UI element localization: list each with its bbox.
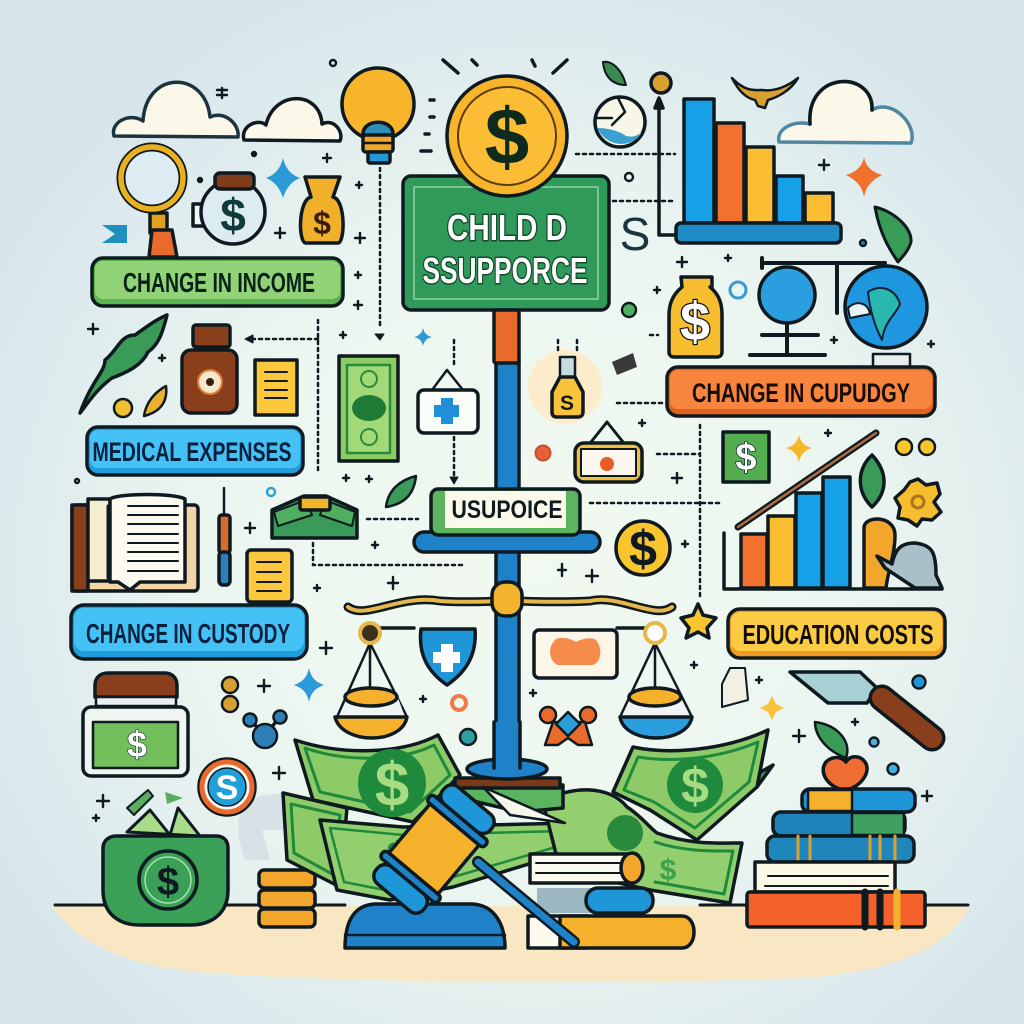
icon: bird [732,78,798,108]
icon: orange s coin: S [216,769,238,807]
icon: shield [420,629,475,685]
main sign [403,176,609,310]
money pile: $ [375,751,409,820]
icon: small smiley [114,399,132,417]
icon: light bulb [342,68,414,163]
icon: clock globe [595,97,645,147]
sign text [422,207,588,291]
icon: gear [895,439,941,526]
icon: jar of money [83,673,188,776]
icon: green arrow [165,792,183,804]
icon: knife [790,672,932,738]
label: usupoice [414,489,600,552]
icon: money bag right: $ [680,292,710,352]
icon: dollar coin [447,76,567,196]
icon: leaf [860,455,884,507]
icon: money bag [301,177,343,243]
icon: first aid sign [418,370,478,433]
decorative sparkles [88,88,934,821]
icon: magnifying glass [121,147,183,257]
icon: apple and leaf [815,722,867,790]
icon: stand base [453,722,563,812]
icon: orange star [846,157,882,197]
icon: money jar [193,173,265,244]
icon: yellow halo bottle [528,350,602,424]
icon: gavel [345,777,574,948]
icon: puzzle [722,668,748,707]
bar chart: lower [724,433,942,589]
coin rays [421,60,567,151]
icon: note 2 [247,550,292,602]
icon: yellow halo bottle: S [560,392,574,415]
icon: dollar coin small [616,521,670,577]
icon: medicine bottle [182,325,237,413]
icon: teal gear [460,729,476,745]
icon: money bag: $ [313,205,331,241]
arrow: solid up to token [655,98,675,235]
signpost pole [494,310,519,774]
icon: sparkle blue [266,158,300,198]
label: education costs [728,609,945,658]
icon: heart card [534,630,617,678]
left pan [335,688,407,738]
label: medical expenses [87,427,303,475]
icon: tag [612,353,637,375]
label: change in income: CHANGE IN INCOME [123,267,315,298]
scales of justice [335,582,692,738]
icon: stack of books center [528,853,694,948]
cloud left [113,82,238,137]
icon: green bar [127,790,153,815]
icon: orange s coin [199,759,255,815]
money pile [283,730,773,903]
label: education costs: EDUCATION COSTS [742,619,934,650]
icon: leaf top right [875,207,911,262]
icon: note [255,360,297,415]
icon: jar of money: $ [127,724,147,765]
icon: stack of books right [747,789,925,927]
icon: hand with figure [864,519,942,588]
icon: small coin top [651,73,671,93]
icon: banknote vertical [339,356,398,461]
cloud middle [243,99,341,141]
icon: blue molecule [244,710,286,748]
icon: money jar: $ [220,189,246,241]
icon: balance and globes [750,258,885,355]
icon: small leaf top [603,62,626,85]
icon: banknote square: $ [735,437,757,479]
text: stray S: S [620,208,650,260]
label: medical expenses: MEDICAL EXPENSES [92,437,292,467]
icon: small blue shape [102,225,127,243]
icon: orange flower [536,446,550,460]
icon: green envelope [272,496,357,538]
paper strip [483,787,565,823]
label: change in cupudgy: CHANGE IN CUPUDGY [692,378,910,408]
icon: feather [80,315,167,413]
icon: sparkle blue lower [294,668,324,702]
icon: yellow star [786,435,812,462]
icon: globe [845,266,927,367]
icon: pen [219,488,230,585]
icon: open book [72,494,198,591]
sign text: SSUPPORCE [422,250,588,291]
small rings [75,60,926,774]
icon: yellow star small [681,604,716,638]
label: change in income [92,258,343,306]
icon: coin stack [259,870,315,927]
money pile: $ [386,835,408,877]
right pan [620,688,692,738]
icon: dollar coin small: $ [629,521,657,577]
bar chart: top [676,99,841,243]
icon: dollar coin: $ [485,92,529,181]
icon: money bag right [669,277,722,357]
icon: blue sparkle [414,328,432,346]
icon: small coins [222,677,238,712]
icon: green wallet [103,808,228,925]
connector lines [252,154,720,597]
icon: hanging fire sign [575,422,642,482]
arrowheads [245,334,458,484]
label: usupoice: USUPOICE [452,496,562,524]
icon: small leaf [144,386,166,416]
icon: orange ring [452,696,466,710]
money pile: $ [681,758,709,814]
icon: small yellow sparkle [760,696,784,720]
faint shapes [238,792,300,860]
money pile: $ [660,854,677,887]
icon: small figure [540,707,596,745]
cloud right [779,82,912,143]
ground line [55,904,968,906]
label: change in custody: CHANGE IN CUSTODY [86,618,290,649]
label: change in cupudgy [667,367,935,416]
ground [52,906,970,982]
icon: green leaf [386,476,416,507]
label: change in custody [71,605,307,659]
icon: green wallet: $ [157,860,179,904]
sign text: CHILD D [447,207,567,248]
icon: banknote square [723,432,769,482]
